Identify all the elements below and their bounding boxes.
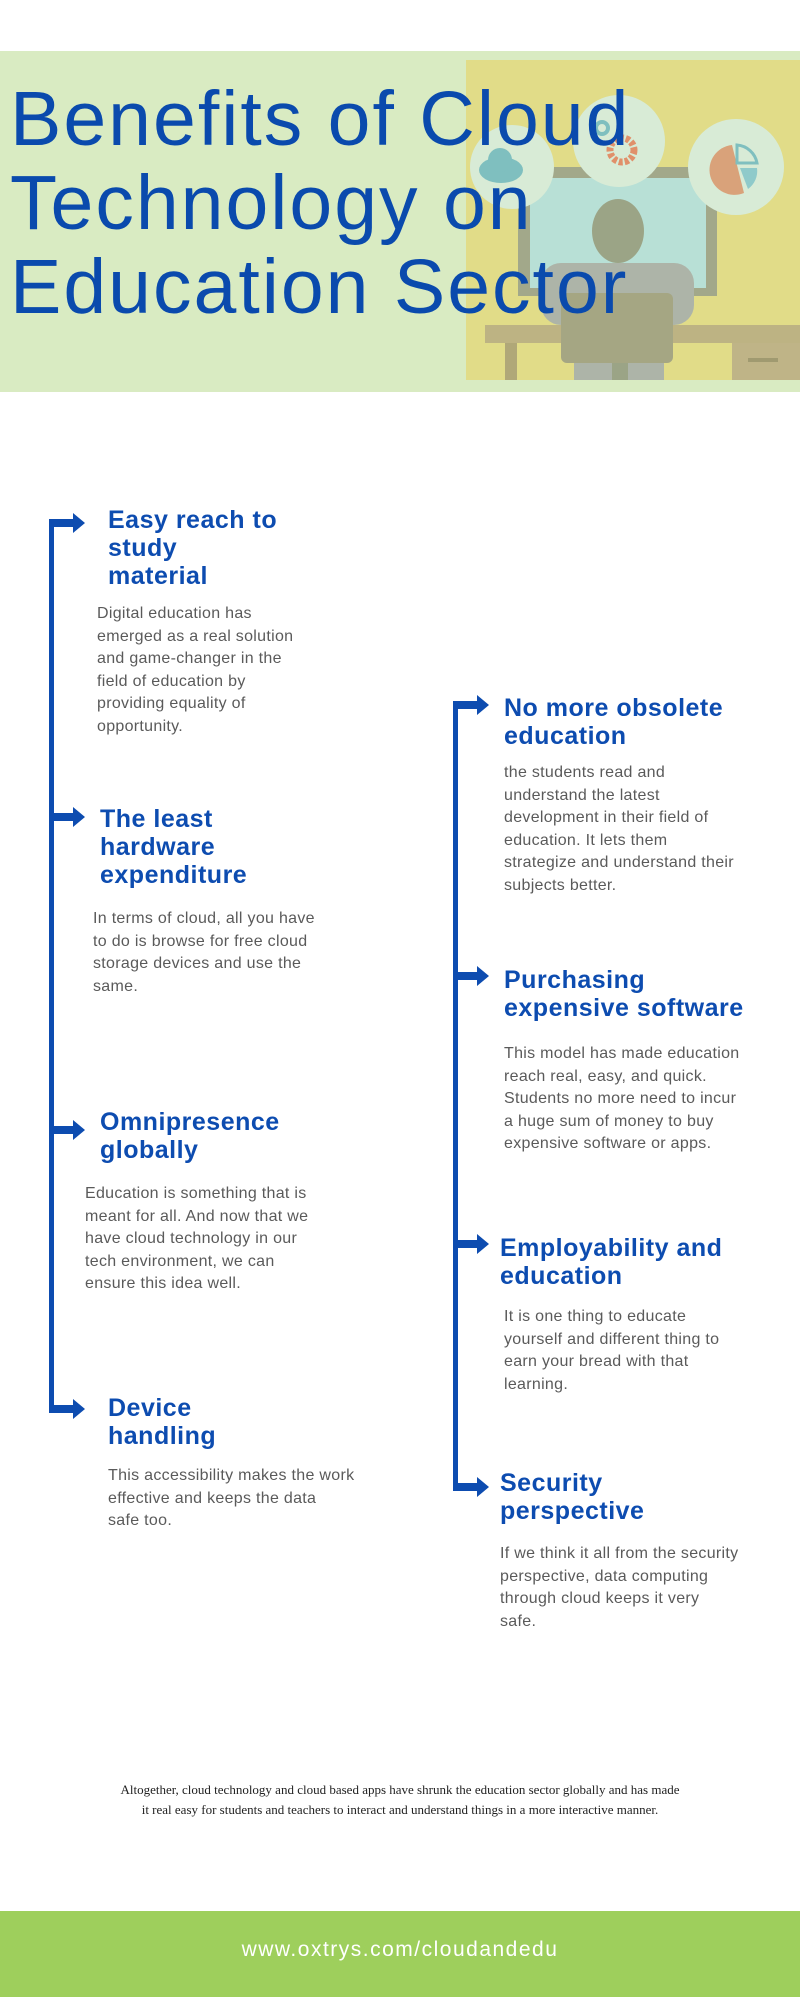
- text: employability: earn your bread with that: [504, 1353, 688, 1370]
- text: device handling: [108, 1467, 354, 1529]
- heading: security: [500, 1469, 644, 1525]
- heading: obsolete: [504, 694, 723, 750]
- text: easy reach: providing equality of: [97, 695, 246, 712]
- text: easy reach: emerged as a real solution: [97, 628, 293, 644]
- heading: device handling: Device: [108, 1394, 192, 1422]
- heading: least hardware: expenditure: [100, 861, 247, 889]
- heading: employability: [500, 1234, 722, 1290]
- icon: gear bubble: [573, 95, 665, 187]
- text: omnipresence: tech environment, we can: [85, 1252, 275, 1270]
- heading: employability: education: [500, 1262, 623, 1290]
- title: Education Sector: [10, 244, 628, 330]
- text: omnipresence: have cloud technology in our: [85, 1230, 297, 1247]
- footer band: [0, 1911, 800, 1997]
- heading: least hardware: [100, 805, 247, 889]
- text: security: [500, 1545, 738, 1630]
- text: easy reach: and game-changer in the: [97, 650, 282, 667]
- text: easy reach: opportunity.: [97, 718, 183, 734]
- text: security: perspective, data computing: [500, 1568, 708, 1584]
- text: security: If we think it all from the security: [500, 1545, 738, 1562]
- text: employability: It is one thing to educate: [504, 1308, 686, 1325]
- text: security: safe.: [500, 1612, 536, 1630]
- heading: least hardware: The least: [100, 805, 213, 833]
- arrow: left 1: [49, 513, 85, 533]
- heading: easy reach: Easy reach to: [108, 506, 277, 534]
- text: easy reach: field of education by: [97, 672, 246, 690]
- text: purchasing: a huge sum of money to buy: [504, 1112, 714, 1130]
- arrow: right 1: [453, 695, 489, 715]
- conclusion text: [120, 1782, 680, 1817]
- title: [10, 76, 630, 330]
- icon: pie chart bubble: [688, 119, 784, 215]
- heading: security: perspective: [500, 1497, 644, 1525]
- heading: device handling: handling: [108, 1422, 216, 1450]
- arrow: right 4: [453, 1477, 489, 1497]
- heading: omnipresence: globally: [100, 1136, 198, 1164]
- text: omnipresence: ensure this idea well.: [85, 1275, 241, 1292]
- heading: least hardware: hardware: [100, 833, 215, 861]
- illustration: student at computer: [466, 60, 800, 380]
- text: obsolete: understand the latest: [504, 786, 660, 804]
- text: omnipresence: meant for all. And now that we: [85, 1208, 308, 1224]
- text: least hardware: In terms of cloud, all you have: [93, 910, 315, 927]
- text: omnipresence: Education is something that is: [85, 1185, 307, 1202]
- text: security: through cloud keeps it very: [500, 1590, 699, 1607]
- text: purchasing: Students no more need to incur: [504, 1090, 736, 1107]
- text: device handling: This accessibility makes the work: [108, 1467, 354, 1484]
- text: purchasing: This model has made education: [504, 1045, 740, 1062]
- heading: easy reach: material: [108, 562, 208, 590]
- arrow: right 2: [458, 966, 489, 986]
- text: obsolete: subjects better.: [504, 876, 616, 894]
- right timeline line: [453, 705, 458, 1489]
- title: Technology on: [10, 160, 533, 246]
- heading: purchasing: [504, 966, 744, 1022]
- arrow: right 3: [458, 1234, 489, 1254]
- heading: easy reach: [108, 506, 277, 590]
- heading: omnipresence: [100, 1108, 280, 1164]
- title: Benefits of Cloud: [10, 76, 630, 162]
- text: least hardware: to do is browse for free cloud: [93, 932, 307, 950]
- text: purchasing: reach real, easy, and quick.: [504, 1068, 707, 1084]
- heading: device handling: [108, 1394, 216, 1450]
- heading: easy reach: study: [108, 534, 177, 562]
- text: easy reach: [97, 605, 293, 734]
- text: obsolete: education. It lets them: [504, 832, 667, 848]
- header band: [0, 51, 800, 392]
- text: omnipresence: [85, 1185, 308, 1292]
- text: least hardware: storage devices and use the: [93, 955, 301, 972]
- text: obsolete: [504, 764, 734, 894]
- text: obsolete: the students read and: [504, 764, 665, 781]
- text: purchasing: expensive software or apps.: [504, 1135, 711, 1152]
- heading: obsolete: education: [504, 722, 627, 750]
- heading: omnipresence: Omnipresence: [100, 1108, 280, 1136]
- text: obsolete: strategize and understand their: [504, 854, 734, 871]
- icon: cloud bubble: [470, 125, 554, 209]
- text: least hardware: same.: [93, 978, 138, 994]
- heading: purchasing: Purchasing: [504, 966, 645, 994]
- text: employability: [504, 1308, 719, 1392]
- heading: employability: Employability and: [500, 1234, 722, 1262]
- heading: security: Security: [500, 1469, 603, 1497]
- arrow: left 4: [49, 1399, 85, 1419]
- text: least hardware: [93, 910, 315, 994]
- text: obsolete: development in their field of: [504, 809, 708, 826]
- text: employability: learning.: [504, 1376, 568, 1392]
- text: easy reach: Digital education has: [97, 605, 252, 622]
- conclusion text: Altogether, cloud technology and cloud based apps have shrunk the education sector globally and has made: [120, 1782, 680, 1797]
- arrow: left 2: [54, 807, 85, 827]
- text: device handling: safe too.: [108, 1512, 172, 1529]
- text: employability: yourself and different thing to: [504, 1330, 719, 1348]
- text: device handling: effective and keeps the data: [108, 1490, 316, 1506]
- heading: purchasing: expensive software: [504, 994, 744, 1022]
- heading: obsolete: No more obsolete: [504, 694, 723, 722]
- footer url: www.oxtrys.com/cloudandedu: [242, 1938, 558, 1961]
- arrow: left 3: [54, 1120, 85, 1140]
- left timeline line: [49, 523, 54, 1410]
- text: purchasing: [504, 1045, 740, 1152]
- conclusion text: it real easy for students and teachers to interact and understand things in a more interactive manner.: [142, 1802, 658, 1817]
